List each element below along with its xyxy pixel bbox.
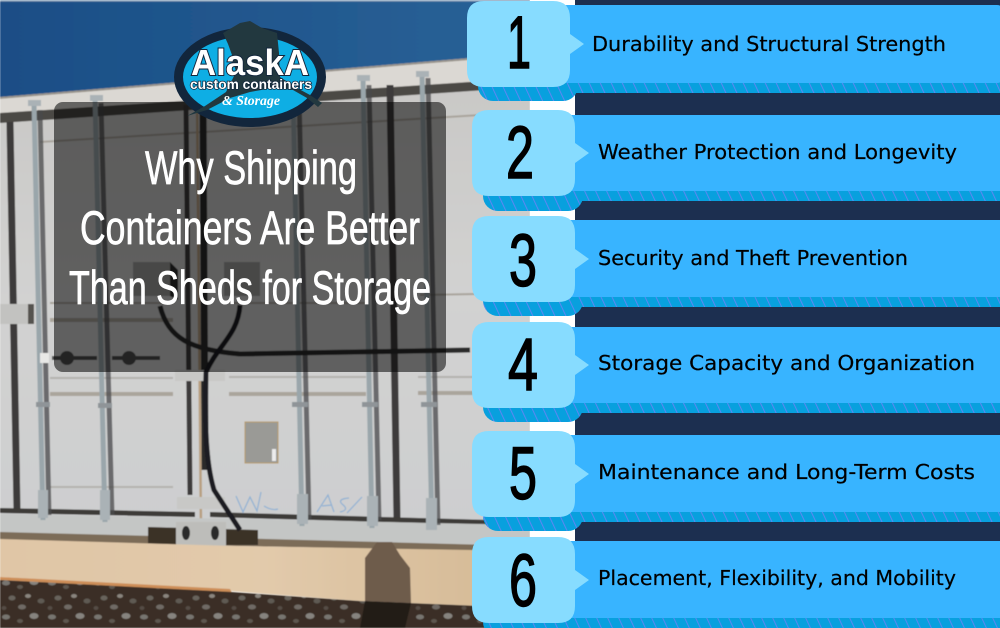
row 5: Maintenance and Long-Term Costs: 5 xyxy=(509,432,537,515)
row 6: Placement, Flexibility, and Mobility: 6 xyxy=(509,539,537,622)
row 5: Maintenance and Long-Term Costs xyxy=(472,431,1000,531)
title xyxy=(69,141,431,314)
logo: Alaska Custom Containers & Storage: custom containers xyxy=(190,76,312,92)
row 1: Durability and Structural Strength: 1 xyxy=(507,1,531,84)
row 3: Security and Theft Prevention xyxy=(472,216,1000,316)
row 4: Storage Capacity and Organization: Storage Capacity and Organization xyxy=(598,351,975,375)
row 6: Placement, Flexibility, and Mobility: Placement, Flexibility, and Mobility xyxy=(598,566,956,590)
row 4: Storage Capacity and Organization xyxy=(472,322,1000,422)
row 1: Durability and Structural Strength: Durability and Structural Strength xyxy=(592,32,946,56)
photo: shipping container against a blue sky xyxy=(0,0,530,628)
row 2: Weather Protection and Longevity: Weather Protection and Longevity xyxy=(598,140,957,164)
row 2: Weather Protection and Longevity xyxy=(472,110,1000,211)
title: Why Shipping xyxy=(145,141,357,194)
logo: Alaska Custom Containers & Storage: AlaskA xyxy=(191,42,309,83)
row 4: Storage Capacity and Organization: 4 xyxy=(508,323,538,406)
row 5: Maintenance and Long-Term Costs: Maintenance and Long-Term Costs xyxy=(598,460,975,484)
row 6: Placement, Flexibility, and Mobility xyxy=(472,537,1000,628)
title: Than Sheds for Storage xyxy=(69,261,431,314)
row 3: Security and Theft Prevention: 3 xyxy=(509,219,537,302)
row 1: Durability and Structural Strength xyxy=(467,1,1000,101)
logo: Alaska Custom Containers & Storage xyxy=(174,21,326,127)
row 3: Security and Theft Prevention: Security and Theft Prevention xyxy=(598,246,908,270)
logo: Alaska Custom Containers & Storage: & Storage xyxy=(222,94,280,109)
panel: dark translucent title backdrop xyxy=(54,102,446,372)
title: Containers Are Better xyxy=(80,201,420,254)
row 2: Weather Protection and Longevity: 2 xyxy=(506,111,534,194)
